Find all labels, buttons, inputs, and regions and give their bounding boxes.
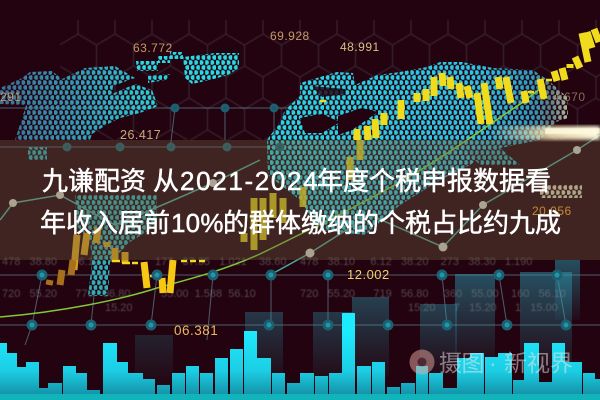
watermark: 新视界 — [504, 350, 573, 376]
upper glow streak — [490, 126, 600, 140]
watermark: 摄图 — [439, 350, 484, 376]
faint data table numbers: 15.20 — [105, 302, 133, 314]
network nodes — [28, 105, 570, 329]
faint data table numbers: 478 38.10 6.12 38.20 273 38.30 1.190 — [300, 256, 532, 268]
bottom cyan bar chart — [0, 313, 600, 400]
title text — [40, 166, 561, 238]
faint data table numbers: 15.20 7 15.20 1 15.00 — [408, 302, 558, 314]
title text: 10% — [171, 208, 224, 238]
floating value labels: 291 — [0, 90, 22, 104]
floating value labels: 06.381 — [174, 323, 218, 338]
green trend curve — [0, 85, 545, 317]
band label: 20.056 — [532, 204, 572, 218]
dot map: left continent — [0, 66, 170, 296]
node grid lines — [0, 108, 600, 345]
title text: 的群体缴纳的个税占比约九成 — [223, 208, 561, 238]
candlesticks — [49, 29, 599, 293]
faint data table numbers — [2, 256, 566, 314]
floating value labels: 48.991 — [340, 40, 380, 54]
title text: 年收入居前 — [40, 208, 170, 238]
hexagon grid — [60, 20, 600, 140]
faint data table numbers: 478 38.80 6.12 — [2, 256, 100, 268]
floating value labels — [0, 29, 586, 338]
floating value labels: 69.928 — [270, 29, 310, 43]
title text: 九谦配资 — [42, 166, 146, 196]
title text: 从 — [153, 166, 179, 196]
ghost bars — [135, 260, 580, 385]
title band — [0, 140, 600, 260]
faint data table numbers: 720 55.20 719 56.80 360 55.00 160 56.10 — [300, 288, 566, 300]
faint data table numbers: 720 55.20 779 56.80 55.00 1.588 56.10 — [2, 288, 256, 300]
title text: 年度个税申报数据看 — [317, 166, 551, 196]
floating value labels: 12.002 — [347, 267, 390, 282]
title text: 2021-2024 — [180, 166, 319, 196]
dot map: upper middle cluster — [136, 52, 239, 84]
dot map: right continent — [267, 62, 582, 235]
floating value labels: 63.772 — [133, 41, 173, 55]
watermark: · — [489, 350, 497, 376]
floating value labels: 26.417 — [120, 128, 161, 142]
faint data table numbers: 177 37.35 1.021 38.60 — [155, 256, 286, 268]
teal polyline with nodes — [0, 135, 600, 275]
watermark — [410, 350, 573, 376]
dark gaps in right continent — [300, 86, 378, 135]
floating value labels: 4.670 — [553, 90, 586, 104]
